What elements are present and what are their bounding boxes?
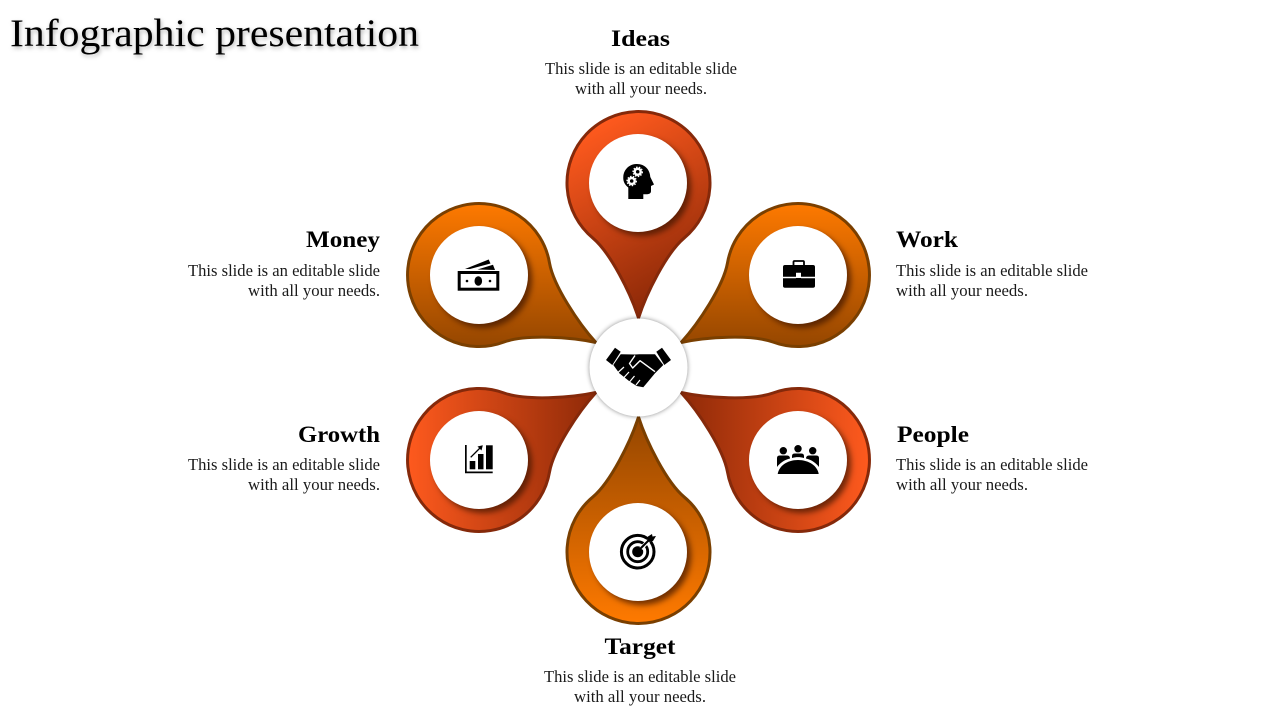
label: target: This slide is an editable slide (544, 667, 736, 686)
label: work: with all your needs. (896, 281, 1028, 300)
icon: people around table (777, 445, 819, 474)
label: ideas (545, 26, 737, 98)
pin: money (381, 177, 632, 404)
label: money: Money (306, 227, 381, 252)
label: money (188, 227, 381, 300)
label: growth: This slide is an editable slide (188, 455, 380, 474)
title: Infographic presentation (10, 12, 419, 55)
label: people (896, 422, 1088, 494)
label: money: with all your needs. (248, 281, 380, 300)
label: ideas: Ideas (611, 26, 670, 51)
icon: money (459, 260, 498, 289)
label: money: This slide is an editable slide (188, 261, 380, 280)
label: work: Work (896, 227, 958, 252)
pin: work (645, 177, 896, 404)
label: people: People (897, 422, 969, 447)
icon: head with gears (623, 164, 654, 199)
pin: people (645, 331, 896, 558)
label: people: This slide is an editable slide (896, 455, 1088, 474)
label: growth: with all your needs. (248, 475, 380, 494)
label: growth: Growth (298, 422, 380, 447)
label: target: Target (604, 634, 676, 659)
label: work: This slide is an editable slide (896, 261, 1088, 280)
label: target: with all your needs. (574, 687, 706, 706)
pin: target (567, 417, 710, 623)
label: target (544, 634, 736, 706)
icon: briefcase (783, 261, 815, 288)
label: ideas: with all your needs. (575, 79, 707, 98)
center hub circle (590, 318, 688, 416)
pin: ideas (567, 112, 710, 318)
label: work (896, 227, 1088, 300)
icon: target (621, 534, 656, 568)
pin: growth (381, 331, 632, 558)
label: people: with all your needs. (896, 475, 1028, 494)
label: ideas: This slide is an editable slide (545, 59, 737, 78)
icon: bar chart growth (465, 445, 493, 473)
icon: handshake (606, 348, 671, 387)
label: growth (188, 422, 380, 494)
